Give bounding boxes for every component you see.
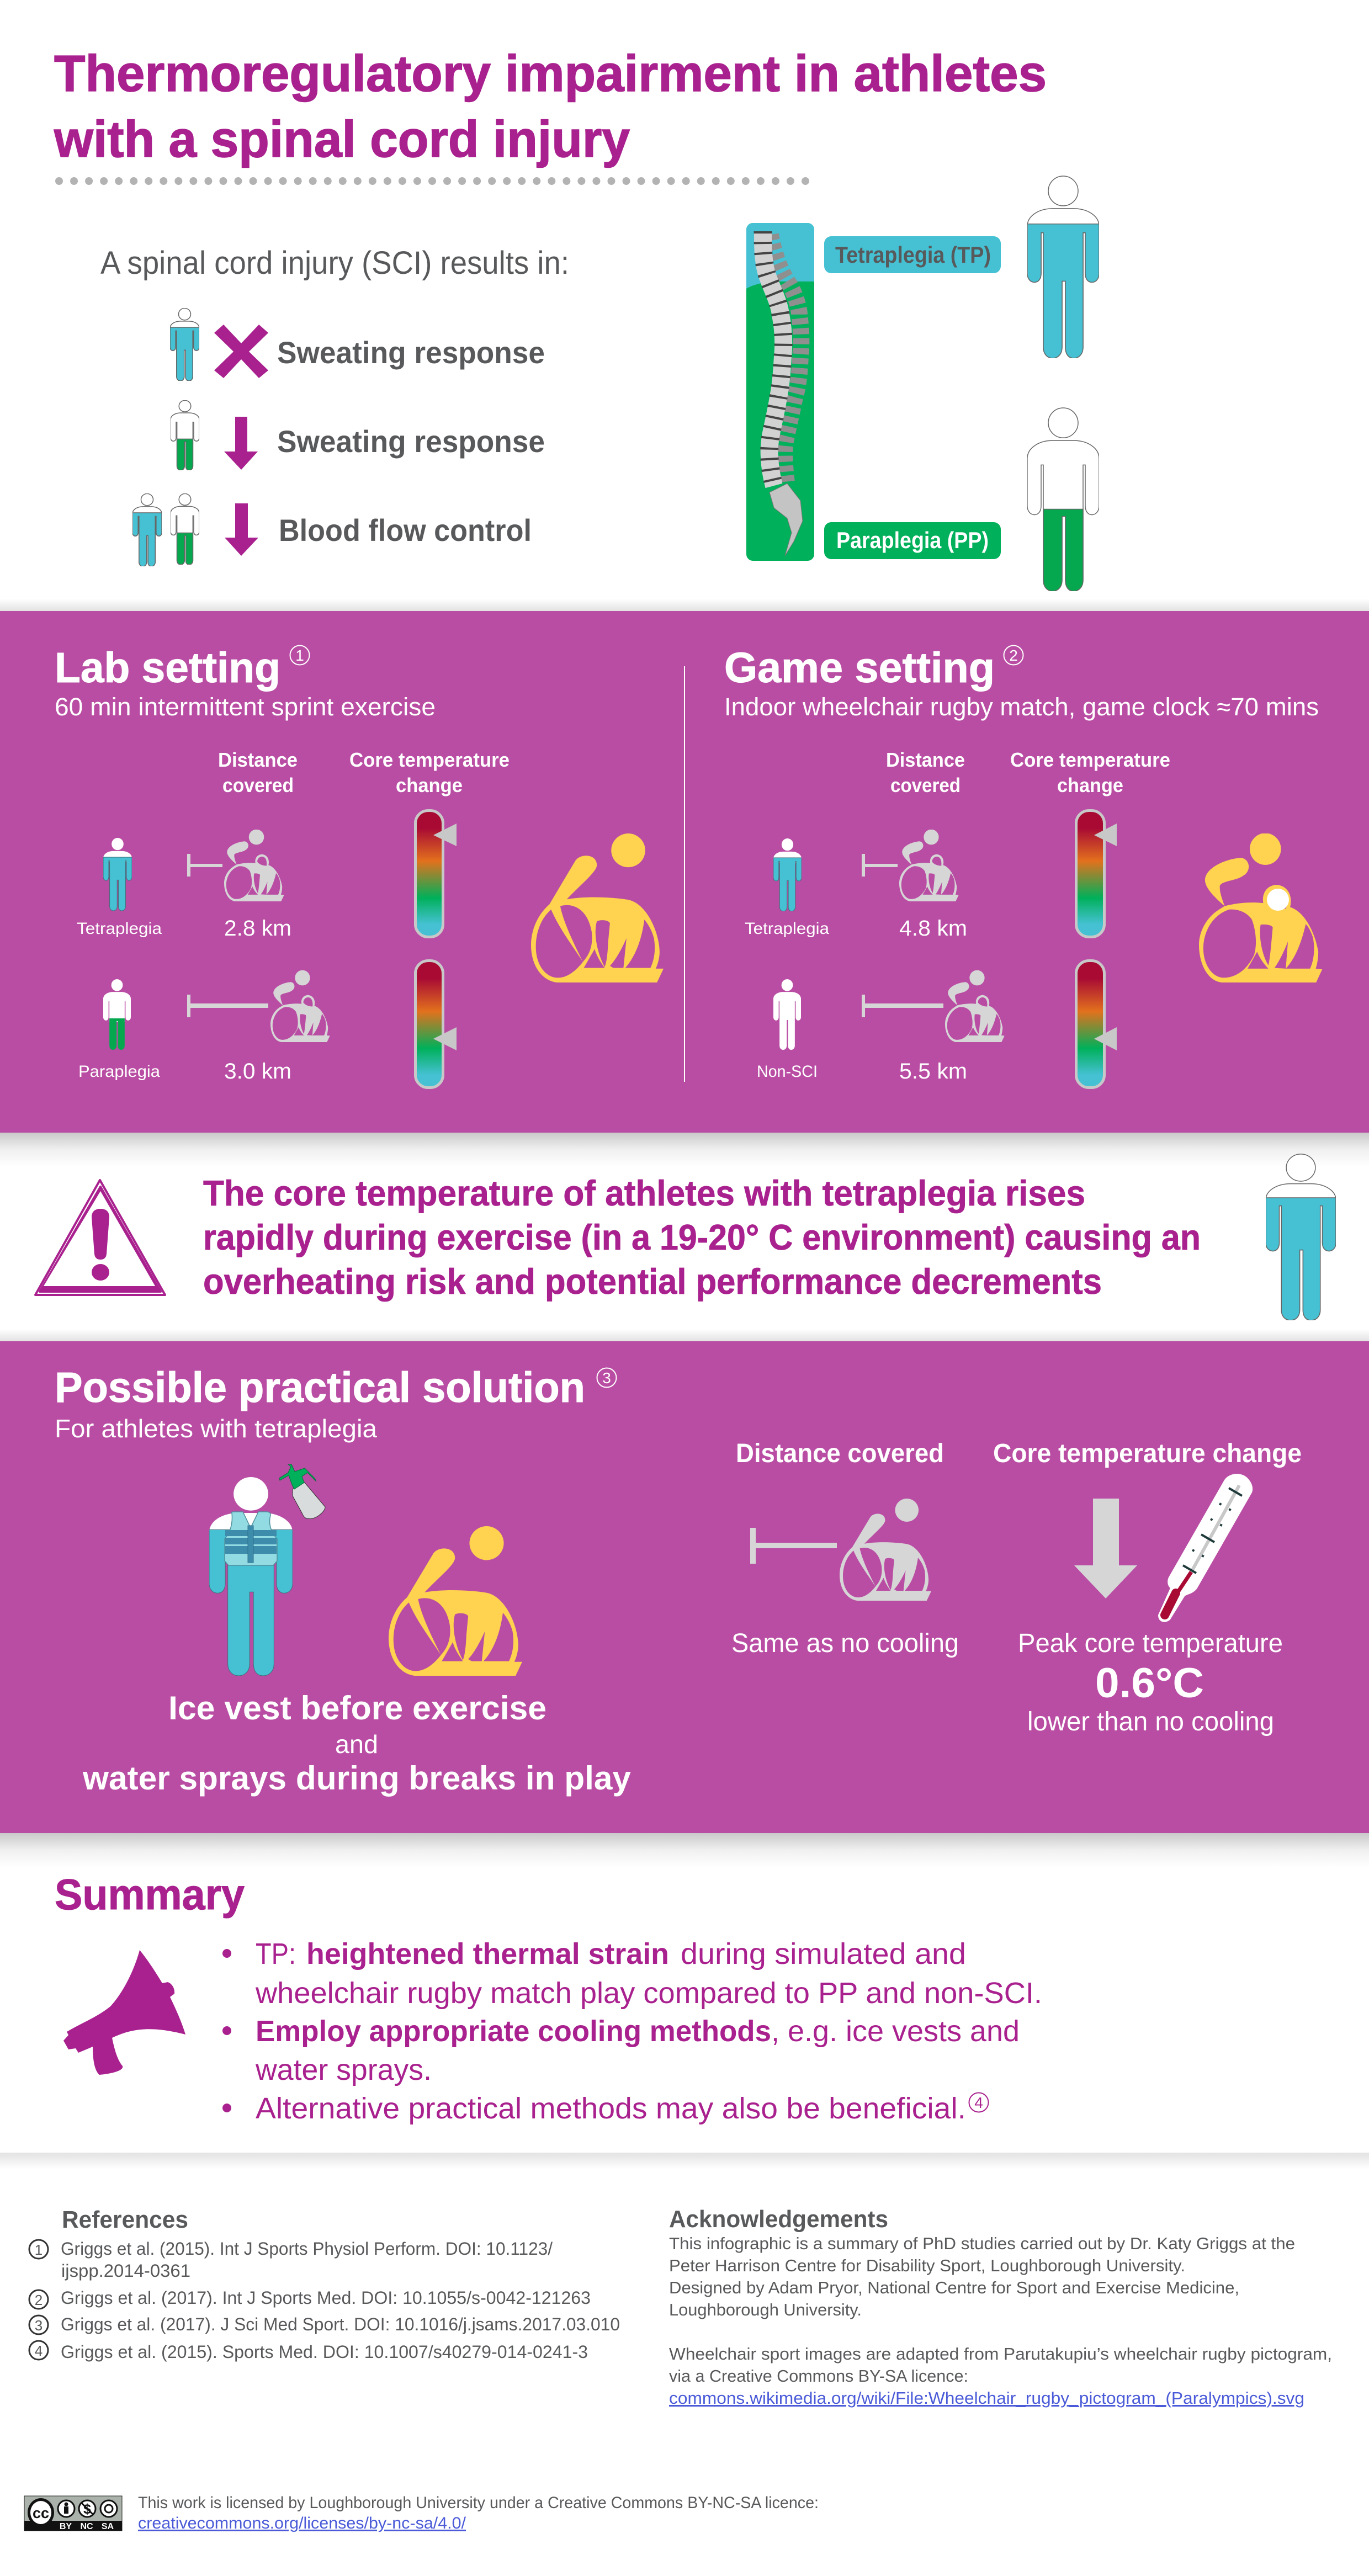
figure: tetraplegia body <box>1027 176 1099 358</box>
column headings: lab: covered <box>222 774 294 796</box>
acknowledgements <box>669 2206 1332 2408</box>
acknowledgements: Acknowledgements <box>669 2206 888 2233</box>
lab row: paraplegia: Paraplegia <box>78 1063 160 1081</box>
acknowledgements: Loughborough University. <box>669 2300 862 2319</box>
tetraplegia label: Tetraplegia (TP) <box>835 242 991 268</box>
effect row: paraplegia reduced sweating response: Sweating response <box>277 424 545 459</box>
core temperature result <box>993 1439 1302 1736</box>
icon: creative commons badge: $ <box>83 2501 91 2517</box>
distance covered result: Same as no cooling <box>731 1629 959 1658</box>
lab row: paraplegia <box>78 960 457 1087</box>
acknowledgements: via a Creative Commons BY-SA licence: <box>669 2366 968 2386</box>
core temperature result: Core temperature change <box>993 1439 1302 1468</box>
title: Thermoregulatory impairment in athletes <box>54 45 1047 102</box>
licence text: creativecommons.org/licenses/by-nc-sa/4.0/ <box>138 2514 466 2532</box>
heading: practical solution: 3 <box>602 1369 611 1387</box>
distance covered result <box>731 1439 959 1658</box>
paraplegia label: Paraplegia (PP) <box>836 527 989 553</box>
intro text: A spinal cord injury (SCI) results in: <box>100 245 569 281</box>
references: ijspp.2014-0361 <box>61 2261 190 2281</box>
summary bullet list: , e.g. ice vests and <box>771 2015 1020 2048</box>
references: 4 <box>35 2343 43 2359</box>
heading: lab setting: 60 min intermittent sprint exercise <box>55 693 436 721</box>
solution text: water sprays during breaks in play <box>82 1760 632 1797</box>
callout: overheating risk: rapidly during exercise (in a 19-20° C environment) causing an <box>203 1217 1201 1257</box>
figure: paraplegia body <box>1027 408 1099 591</box>
game row: tetraplegia <box>745 810 1117 941</box>
summary bullet list: during simulated and <box>681 1937 966 1970</box>
game row: non-SCI: Non-SCI <box>757 1063 818 1081</box>
icon: creative commons badge <box>24 2496 122 2531</box>
spine diagram <box>746 223 814 561</box>
acknowledgements: This infographic is a summary of PhD studies carried out by Dr. Katy Griggs at the <box>669 2234 1295 2253</box>
lab row: tetraplegia: 2.8 km <box>224 916 291 941</box>
references: 1 <box>35 2242 43 2258</box>
callout: overheating risk <box>203 1173 1201 1302</box>
heading: lab setting: 1 <box>295 647 304 664</box>
game row: tetraplegia: 4.8 km <box>899 916 967 941</box>
solution text: and <box>335 1730 378 1759</box>
references <box>29 2206 620 2362</box>
references: 3 <box>35 2317 43 2334</box>
acknowledgements: Peter Harrison Centre for Disability Sport, Loughborough University. <box>669 2256 1185 2275</box>
warning icon <box>35 1180 165 1295</box>
heading: lab setting: Lab setting <box>55 644 280 692</box>
lab row: tetraplegia <box>77 810 457 941</box>
heading: game setting: 2 <box>1009 647 1018 664</box>
icon: creative commons badge: NC <box>80 2522 93 2531</box>
tetraplegia label <box>824 236 1001 273</box>
icon: lab wheelchair athlete <box>531 833 664 982</box>
icon: yellow wheelchair athlete <box>389 1526 522 1676</box>
licence text <box>138 2494 819 2532</box>
acknowledgements: Designed by Adam Pryor, National Centre for Sport and Exercise Medicine, <box>669 2278 1239 2297</box>
summary bullet list: wheelchair rugby match play compared to PP and non-SCI. <box>255 1977 1042 2010</box>
column headings: lab <box>218 748 510 796</box>
effect row: tetraplegia no sweating response <box>170 308 545 381</box>
title <box>54 45 1047 168</box>
effect row: both reduced blood flow control: Blood flow control <box>279 513 532 548</box>
icon: creative commons badge: SA <box>102 2522 114 2531</box>
effect row: both reduced blood flow control <box>132 493 532 566</box>
figure: athlete with ice vest <box>209 1477 293 1676</box>
summary bullet list: 4 <box>974 2094 983 2111</box>
heading: game setting: Game setting <box>724 644 995 692</box>
summary bullet list: Employ appropriate cooling methods <box>256 2015 771 2048</box>
heading: practical solution <box>55 1364 616 1443</box>
references: Griggs et al. (2015). Sports Med. DOI: 10.1007/s40279-014-0241-3 <box>61 2342 588 2362</box>
solution text: Ice vest before exercise <box>168 1690 546 1727</box>
paraplegia label <box>824 522 1001 559</box>
heading: practical solution: For athletes with tetraplegia <box>55 1414 377 1443</box>
summary bullet list: heightened thermal strain <box>306 1937 669 1970</box>
references: Griggs et al. (2017). Int J Sports Med. DOI: 10.1055/s-0042-121263 <box>61 2288 591 2308</box>
summary bullet list: Alternative practical methods may also be beneficial. <box>256 2092 966 2125</box>
icon: game wheelchair athlete <box>1199 833 1322 982</box>
column headings: game: covered <box>890 774 961 796</box>
column headings: lab: Core temperature <box>349 748 510 771</box>
acknowledgements: Wheelchair sport images are adapted from Parutakupiu’s wheelchair rugby pictogram, <box>669 2344 1332 2363</box>
callout: overheating risk: The core temperature of athletes with tetraplegia rises <box>203 1173 1085 1213</box>
icon: creative commons badge: BY <box>60 2522 72 2531</box>
column headings: game: Core temperature <box>1010 748 1170 771</box>
figure: tetraplegia callout body <box>1266 1154 1336 1320</box>
game row: non-SCI <box>757 960 1117 1087</box>
summary heading: Summary <box>55 1870 245 1919</box>
acknowledgements: commons.wikimedia.org/wiki/File:Wheelchair_rugby_pictogram_(Paralympics).svg <box>669 2388 1304 2408</box>
lab row: tetraplegia: Tetraplegia <box>77 920 162 938</box>
summary bullet list: water sprays. <box>255 2053 432 2086</box>
icon: megaphone <box>63 1950 185 2075</box>
heading: lab setting <box>55 644 436 721</box>
column headings: lab: Distance <box>218 748 298 771</box>
column headings: lab: change <box>396 774 463 796</box>
distance covered result: Distance covered <box>736 1439 944 1468</box>
references: Griggs et al. (2017). J Sci Med Sport. DOI: 10.1016/j.jsams.2017.03.010 <box>61 2314 620 2334</box>
licence text: This work is licensed by Loughborough University under a Creative Commons BY-NC-SA licence: <box>138 2494 819 2512</box>
icon: thermometer <box>1158 1474 1253 1622</box>
icon: creative commons badge: cc <box>33 2505 49 2521</box>
panel: possible practical solution <box>0 1341 1369 1833</box>
game row: non-SCI: 5.5 km <box>899 1059 967 1083</box>
core temperature result: Peak core temperature <box>1018 1629 1283 1658</box>
summary bullet list: TP: <box>256 1937 296 1970</box>
column headings: game: Distance <box>886 748 965 771</box>
column headings: game <box>886 748 1170 796</box>
effect row: paraplegia reduced sweating response <box>171 400 545 470</box>
references: 2 <box>35 2292 43 2308</box>
panel: lab and game settings <box>0 611 1369 1133</box>
callout: overheating risk: overheating risk and potential performance decrements <box>203 1261 1102 1302</box>
effect row: tetraplegia no sweating response: Sweating response <box>277 335 545 370</box>
references: Griggs et al. (2015). Int J Sports Physiol Perform. DOI: 10.1123/ <box>61 2239 553 2259</box>
solution text <box>82 1690 632 1797</box>
heading: game setting <box>724 644 1319 721</box>
core temperature result: 0.6°C <box>1095 1660 1204 1707</box>
title: with a spinal cord injury <box>54 110 630 168</box>
references: References <box>62 2206 188 2233</box>
lab row: paraplegia: 3.0 km <box>224 1059 291 1083</box>
icon: water spray bottle <box>279 1464 325 1519</box>
column headings: game: change <box>1057 774 1123 796</box>
heading: game setting: Indoor wheelchair rugby match, game clock ≈70 mins <box>724 693 1319 721</box>
game row: tetraplegia: Tetraplegia <box>745 920 829 938</box>
summary bullet list <box>222 1937 1042 2125</box>
core temperature result: lower than no cooling <box>1027 1707 1274 1736</box>
heading: practical solution: Possible practical solution <box>55 1364 585 1411</box>
